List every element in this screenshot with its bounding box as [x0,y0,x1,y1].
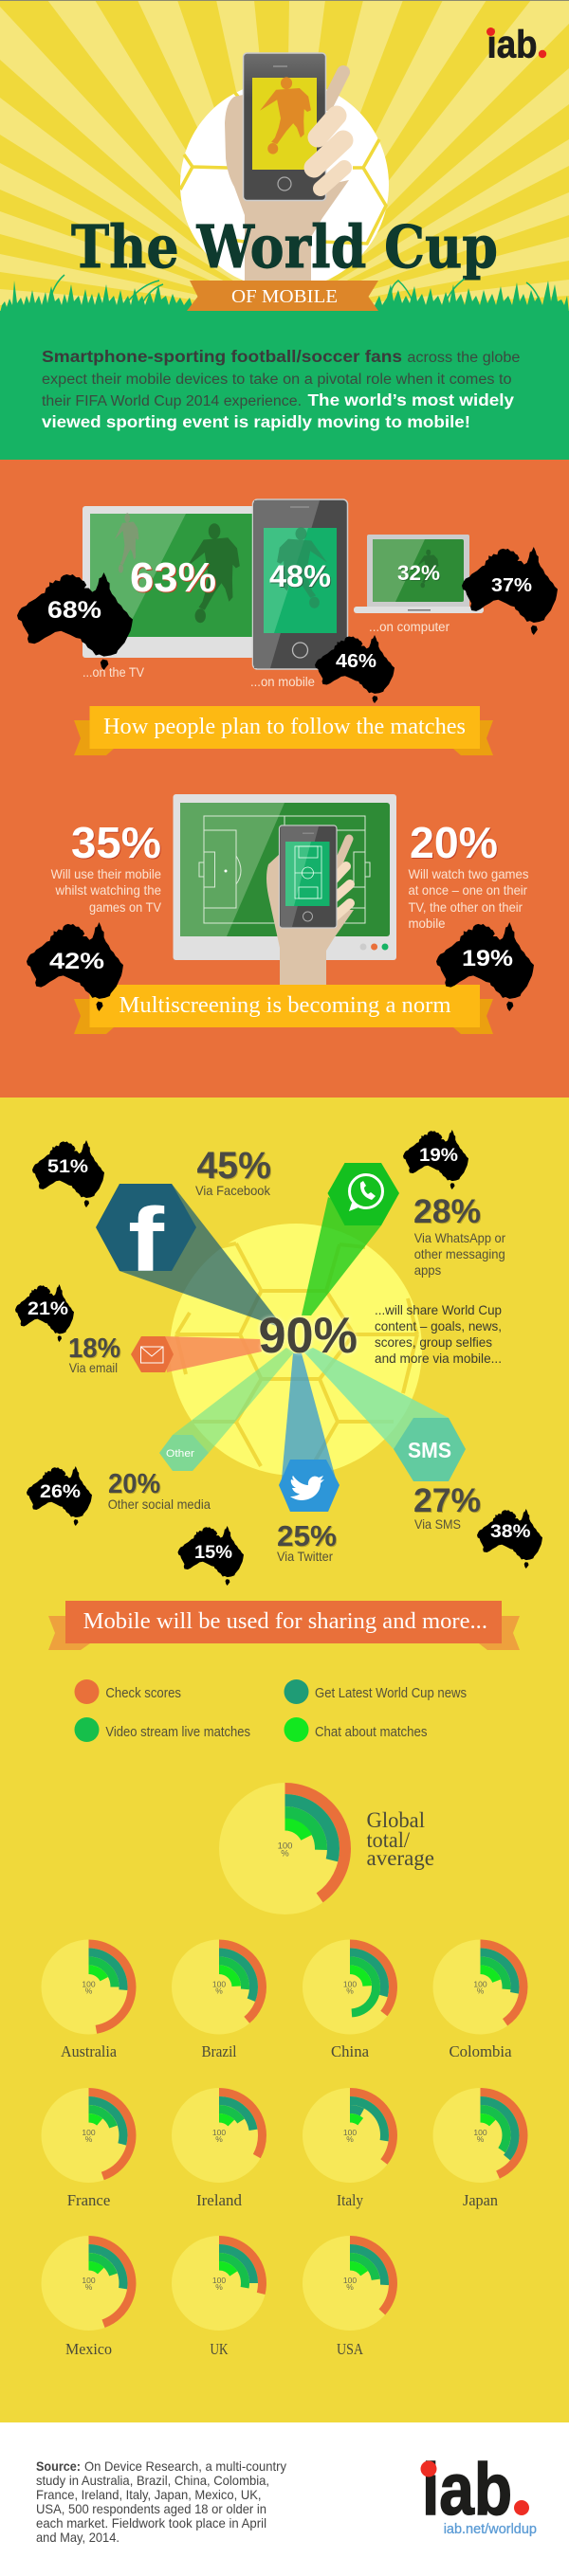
stat: 20% watch two games: at once – one on their [408,882,527,898]
banner: multiscreening: Multiscreening is becoming a norm [119,993,451,1018]
stat: 25% twitter: Via Twitter [277,1549,333,1564]
chart: france: 100 [82,2128,96,2137]
phone body [243,53,326,201]
chart: brazil: Brazil [201,2042,237,2060]
chart: global total: 100 [278,1841,292,1852]
stat: 28% whatsapp: Via WhatsApp or [414,1230,505,1245]
text: will share world cup content: ...will share World Cup [375,1302,502,1317]
legend: Check scores [105,1686,181,1701]
stat: 20% watch two games: mobile [408,916,446,931]
mobile phone [250,499,347,689]
stat: 45% facebook: 45% [197,1145,271,1187]
ray: facebook: f [128,1189,165,1291]
chart: uk: % [215,2282,223,2292]
panel: intro [0,311,569,460]
chart: usa [303,2236,397,2358]
australia map: 19%: 19% [462,946,513,971]
chart: italy: Italy [337,2191,363,2209]
link text: iab.net/worldup [444,2521,537,2537]
legend: Video stream live matches [105,1725,250,1740]
australia map: 15% [178,1526,244,1586]
index finger behind phone [327,72,343,104]
stat: 20% other social [108,1469,211,1512]
stat: 28% whatsapp: apps [414,1262,441,1278]
legend: Chat about matches [315,1725,427,1740]
chart: brazil: 100 [212,1979,226,1988]
chart: australia [42,1939,137,2060]
australia map: 21% [15,1284,74,1342]
australia map: 37% [462,547,558,635]
phone screen with player [252,77,317,170]
stat: 20% other social: Other social media [108,1497,211,1512]
text: will share world cup content: and more via mobile... [375,1351,502,1366]
text: will share world cup content: scores, group selfies [375,1334,492,1350]
chart: italy [303,2088,397,2209]
chart: uk: 100 [212,2276,226,2285]
ray: other social [159,1348,294,1471]
chart: uk [172,2236,266,2358]
australia map: 37%: 37% [491,575,532,596]
chart: australia: % [85,1986,93,1996]
chart: colombia: 100 [473,1979,487,1988]
stat: 20% watch two games: Will watch two games [408,866,529,881]
label: global total average [366,1808,434,1870]
header background [0,0,569,313]
source text: Source: [36,2458,81,2474]
stat: 90% will share: 90% [258,1308,358,1364]
intro text: expect their mobile devices to take on a pivotal role when it comes to [42,372,512,388]
intro text: Smartphone-sporting football/soccer fans [42,347,402,366]
australia map: 42% [27,922,123,1011]
logo: iab top right: iab [487,23,537,66]
chart: brazil [172,1939,266,2060]
intro text: viewed sporting event is rapidly moving to mobile! [42,412,470,431]
ray: whatsapp [302,1163,399,1315]
chart: china [303,1939,397,2060]
chart: mexico: % [85,2282,93,2292]
stat: 20% watch two games [408,818,529,931]
stat: 28% whatsapp [413,1193,505,1278]
banner: mobile will be used for sharing [48,1601,520,1650]
ribbon: of mobile [187,281,378,314]
label: global total average: average [366,1846,434,1870]
chart: china: 100 [343,1979,357,1988]
label: global total average: total/ [366,1828,411,1852]
fingers [314,116,344,189]
chart: ireland: % [215,2134,223,2144]
stat: 35% use mobile whilst watching: 35% [71,818,161,867]
australia map: 19% whatsapp [403,1130,468,1189]
monitor with football pitch [173,794,396,960]
stat: 35% use mobile whilst watching [51,818,162,915]
australia map: 68% [17,572,133,670]
australia map: 19% [436,922,534,1011]
stat: 32% on computer: 32% [397,561,440,585]
laptop [354,535,484,634]
intro text: The world’s most widely [307,390,514,409]
stat: 48% on mobile: 48% [269,559,331,593]
chart: france: % [85,2134,93,2144]
australia map: 46% [315,635,395,703]
chart: brazil: % [215,1986,223,1996]
chart: france [42,2088,137,2209]
ray: sms [303,1348,466,1481]
ray: other social: Other [166,1448,194,1460]
source text: On Device Research, a multi-country [84,2458,286,2474]
text: will share world cup content: content – goals, news, [375,1318,502,1333]
chart: colombia: Colombia [450,2042,512,2060]
intro text: their FIFA World Cup 2014 experience. [42,393,302,409]
stat: 35% use mobile whilst watching: Will use their mobile [51,866,161,881]
hand holding phone over monitor [266,825,354,986]
icon: hand holding phone [225,53,349,281]
chart: uk: UK [211,2340,229,2358]
australia map: 26%: 26% [40,1482,81,1502]
australia map: 38% [477,1509,542,1569]
stat: 25% twitter: 25% [277,1519,337,1552]
logo: iab footer: iab [422,2449,512,2531]
chart: ireland [172,2088,266,2209]
australia map: 15%: 15% [194,1543,232,1563]
stat: 27% sms: 27% [413,1482,481,1519]
stat: 63% on TV: 63% [130,554,216,601]
australia map: 68%: 68% [47,597,101,624]
caption: on computer: ...on computer [369,620,450,634]
australia map: 51%: 51% [47,1157,88,1177]
chart: global total: % [281,1848,289,1859]
chart: australia: 100 [82,1979,96,1988]
grass [0,275,569,313]
legend: Get Latest World Cup news [315,1686,467,1701]
intro text [42,347,520,431]
ray: twitter [279,1353,340,1512]
australia map: 19% whatsapp: 19% [419,1146,458,1166]
caption: on mobile: ...on mobile [250,675,315,689]
chart: usa: USA [337,2340,364,2358]
label: global total average: Global [366,1808,425,1832]
australia map: 26% [27,1466,92,1526]
chart: france: France [67,2191,110,2209]
banner: multiscreening [74,985,493,1034]
chart: china: China [331,2042,369,2060]
chart: australia: Australia [61,2042,117,2060]
ray: sms: SMS [408,1438,451,1462]
chart: italy: 100 [343,2128,357,2137]
chart: italy: % [346,2134,354,2144]
source text [36,2458,286,2545]
chart: japan [432,2088,527,2209]
stat: 45% facebook: Via Facebook [195,1183,271,1198]
text: will share world cup content [375,1302,502,1366]
chart: china: % [346,1986,354,1996]
source text: each market. Fieldwork took place in April [36,2515,266,2531]
title: The World Cup [71,212,498,281]
stat: 18% email: 18% [68,1333,120,1364]
panel: how people follow the matches [0,460,569,1098]
ray: facebook [96,1184,284,1329]
hand palm and arm [225,90,349,281]
banner: how people plan to follow the matches [74,706,493,755]
australia map: 38%: 38% [490,1522,531,1542]
stat: 18% email: Via email [69,1360,118,1375]
panel: sharing and usage [0,1098,569,2422]
ray: email [131,1336,262,1372]
australia map: 51% [32,1140,104,1207]
source text: and May, 2014. [36,2530,119,2545]
stat: 35% use mobile whilst watching: games on TV [89,899,162,915]
chart: usa: % [346,2282,354,2292]
chart: global total [219,1783,434,1914]
chart: japan: Japan [463,2191,498,2209]
ribbon: of mobile: OF MOBILE [231,286,338,307]
stat: 27% sms: Via SMS [414,1516,461,1532]
chart: mexico: 100 [82,2276,96,2285]
stat: 35% use mobile whilst watching: whilst watching the [55,882,161,898]
australia map: 21%: 21% [28,1299,68,1319]
chart: colombia [432,1939,527,2060]
source text: study in Australia, Brazil, China, Colombia, [36,2473,269,2488]
chart: japan: % [477,2134,485,2144]
legend [74,1679,467,1742]
pitch lines [199,816,370,923]
australia map: 46%: 46% [336,651,376,672]
stat: 20% watch two games: 20% [410,818,498,867]
banner: how people plan to follow the matches: How people plan to follow the matches [103,715,466,739]
chart: mexico [42,2236,137,2358]
caption: on the TV: ...on the TV [83,665,144,680]
panel: footer [0,2422,569,2576]
stat: 28% whatsapp: 28% [413,1193,481,1230]
source text: France, Ireland, Italy, Japan, Mexico, UK, [36,2487,262,2502]
intro text: across the globe [407,350,520,366]
chart: mexico: Mexico [65,2340,112,2358]
banner: mobile will be used for sharing: Mobile will be used for sharing and more... [83,1609,487,1634]
stat: 20% watch two games: TV, the other on their [408,899,523,915]
stat: 28% whatsapp: other messaging [414,1246,505,1261]
source text: USA, 500 respondents aged 18 or older in [36,2501,266,2516]
TV [83,506,258,680]
chart: usa: 100 [343,2276,357,2285]
icon: football behind phone [180,81,389,289]
chart: colombia: % [477,1986,485,1996]
icon: large football behind rays [170,1224,422,1476]
chart: japan: 100 [473,2128,487,2137]
chart: ireland: Ireland [196,2191,242,2209]
chart: ireland: 100 [212,2128,226,2137]
stat: 20% other social: 20% [108,1469,160,1499]
australia map: 42%: 42% [49,949,104,974]
